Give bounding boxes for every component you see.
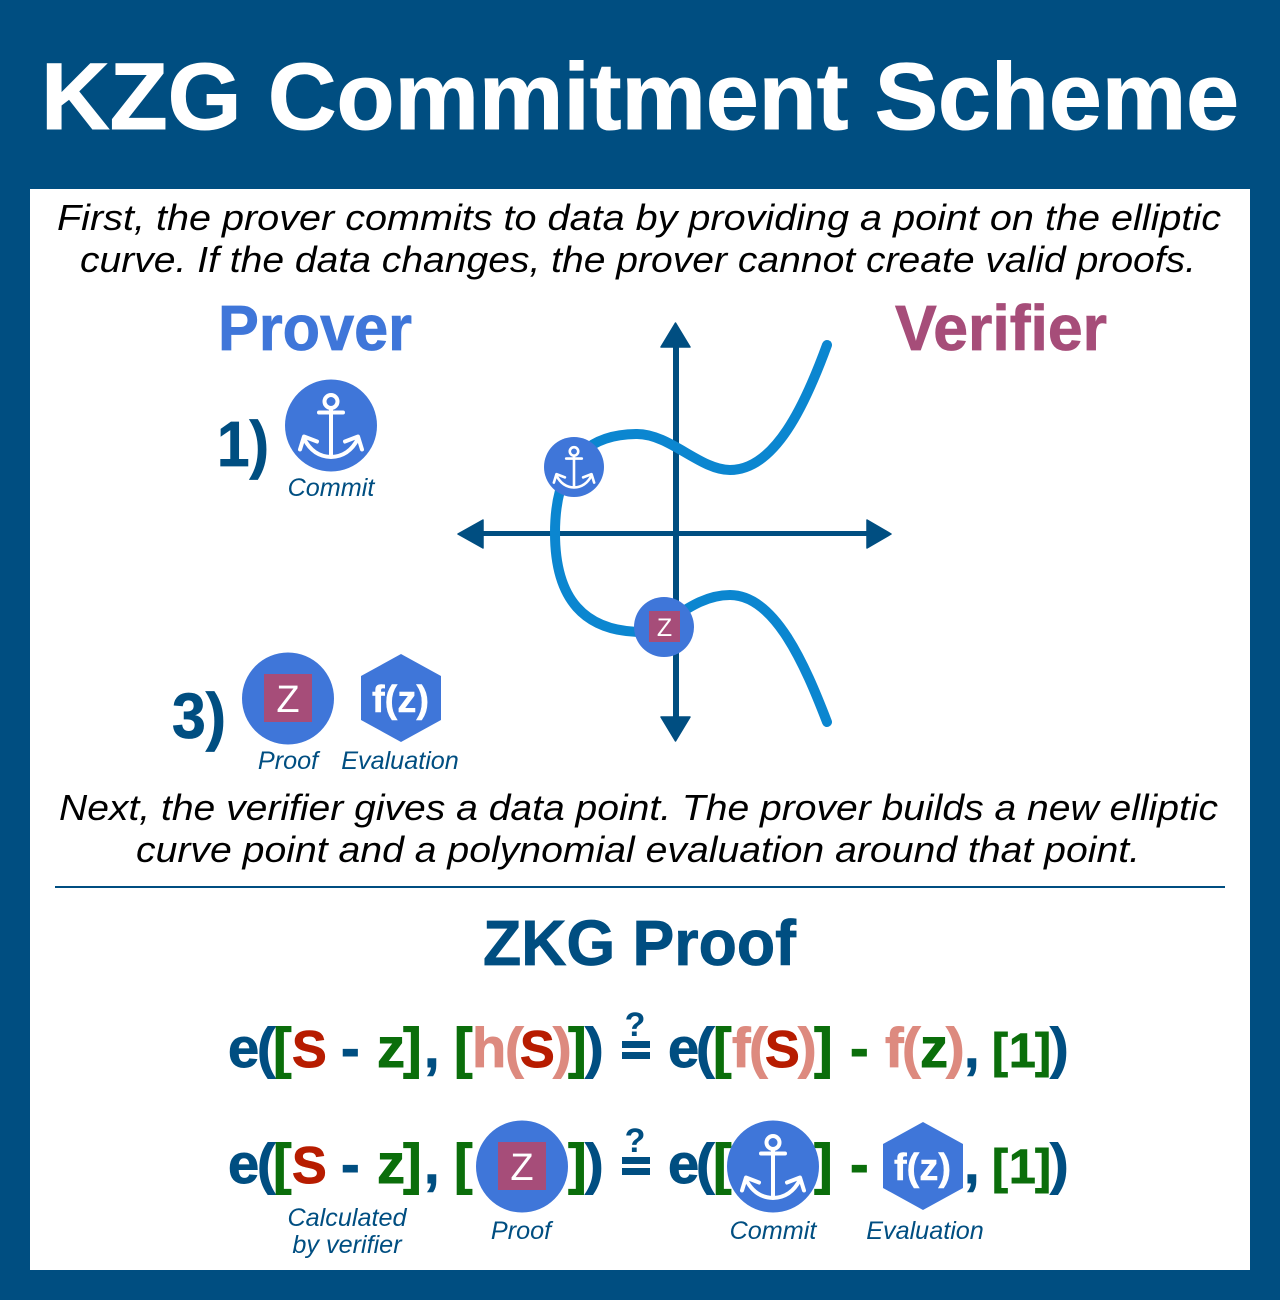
equation: icons: ]: [814, 1132, 833, 1195]
equation: formula: ): [798, 1016, 817, 1079]
point: proof: [634, 597, 694, 657]
text block: intro: curve. If the data changes, the prover cannot create valid proofs.: [80, 239, 1196, 280]
equation: formula: S: [292, 1021, 327, 1079]
equation: formula: S: [520, 1021, 555, 1079]
equation: formula: ,: [424, 1016, 440, 1079]
equation: icons: ): [585, 1132, 604, 1195]
text block: intro: First, the prover commits to data by providing a point on the elliptic: [57, 197, 1221, 238]
equation: formula: S: [765, 1021, 800, 1079]
equation: formula: ): [585, 1016, 604, 1079]
label: proof: Proof: [491, 1217, 554, 1245]
equation: icons: ,: [964, 1132, 980, 1195]
equation: formula: (: [257, 1016, 276, 1079]
equation: formula: 1: [1009, 1025, 1036, 1078]
text block: intro: [57, 197, 1221, 280]
icon: proof: Z: [276, 679, 300, 721]
not-equal check: ?: [625, 1122, 645, 1160]
equation: formula: (: [749, 1016, 768, 1079]
equation: icons: z: [377, 1132, 405, 1195]
text block: next step: Next, the verifier gives a data point. The prover builds a new elliptic: [59, 787, 1218, 828]
equation: formula: f: [732, 1016, 751, 1079]
heading: prover: Prover: [218, 292, 412, 364]
icon: proof in equation: Z: [510, 1147, 534, 1189]
label: proof: Proof: [258, 747, 321, 775]
not-equal check: [622, 1122, 650, 1175]
equation: formula: ): [553, 1016, 572, 1079]
equation: formula: [: [454, 1016, 473, 1079]
equation: formula: z: [920, 1016, 948, 1079]
equation: icons: -: [341, 1132, 360, 1195]
step 3 number: 3): [172, 680, 226, 752]
icon: proof in equation: [476, 1120, 568, 1212]
y axis arrow: [661, 323, 690, 741]
icon: evaluation hexagon: f(z): [372, 679, 429, 721]
equation: icons: e: [668, 1132, 699, 1195]
equation: icons: -: [850, 1132, 869, 1195]
chart: elliptic curve: [458, 323, 891, 741]
icon: evaluation in equation: f(z): [894, 1147, 951, 1189]
point: commit: [544, 437, 604, 497]
equation: formula: (: [696, 1016, 715, 1079]
equation: formula: h: [472, 1016, 506, 1079]
label: commit: Commit: [730, 1217, 817, 1245]
equation: formula: ]: [403, 1016, 422, 1079]
point: proof: Z: [657, 614, 672, 642]
label: commit: Commit: [288, 474, 375, 502]
equation: icons: ): [1050, 1132, 1069, 1195]
equation: formula: -: [341, 1016, 360, 1079]
equation: icons: [: [713, 1132, 732, 1195]
equation: icons: ]: [568, 1132, 587, 1195]
text block: next step: [59, 787, 1218, 870]
label: evaluation: Evaluation: [341, 747, 459, 775]
equation: formula: ]: [568, 1016, 587, 1079]
equation: formula: ): [946, 1016, 965, 1079]
equation: formula: [: [713, 1016, 732, 1079]
label: calculated by verifier: Calculated: [287, 1204, 407, 1232]
equation: icons: ,: [424, 1132, 440, 1195]
label: evaluation: Evaluation: [866, 1217, 984, 1245]
equation: icons: [228, 1122, 1069, 1195]
heading: proof: ZKG Proof: [483, 907, 797, 979]
equation: icons: [: [454, 1132, 473, 1195]
not-equal check: ?: [625, 1006, 645, 1044]
label: calculated by verifier: [287, 1204, 407, 1259]
equation: icons: ]: [1035, 1141, 1051, 1194]
equation: formula: e: [228, 1016, 259, 1079]
icon: proof: [242, 652, 334, 744]
title: KZG Commitment Scheme: [41, 44, 1239, 150]
panel: main content: [30, 189, 1250, 1270]
equation: icons: S: [292, 1137, 327, 1195]
equation: icons: [: [273, 1132, 292, 1195]
equation: formula: ,: [964, 1016, 980, 1079]
equation: formula: (: [505, 1016, 524, 1079]
icon: commit in equation: [727, 1120, 819, 1212]
equation: formula: ): [1050, 1016, 1069, 1079]
curve: [555, 345, 827, 722]
text block: next step: curve point and a polynomial evaluation around that point.: [136, 829, 1140, 870]
label: calculated by verifier: by verifier: [292, 1231, 403, 1259]
icon: evaluation hexagon: [361, 654, 441, 742]
equation: formula: f: [885, 1016, 904, 1079]
heading: verifier: Verifier: [895, 292, 1107, 364]
equation: formula: [228, 1006, 1069, 1079]
equation: formula: (: [902, 1016, 921, 1079]
equation: formula: e: [668, 1016, 699, 1079]
equation: formula: ]: [814, 1016, 833, 1079]
equation: icons: 1: [1009, 1141, 1036, 1194]
equation: icons: (: [696, 1132, 715, 1195]
equation: icons: [: [992, 1141, 1008, 1194]
not-equal check: [622, 1006, 650, 1059]
x axis arrow: [458, 520, 891, 548]
step 1 number: 1): [217, 408, 269, 480]
equation: icons: ]: [403, 1132, 422, 1195]
equation: formula: ]: [1035, 1025, 1051, 1078]
equation: formula: z: [377, 1016, 405, 1079]
equation: icons: e: [228, 1132, 259, 1195]
equation: formula: -: [850, 1016, 869, 1079]
icon: commit anchor: [285, 380, 377, 472]
equation: formula: [: [273, 1016, 292, 1079]
icon: evaluation in equation: [883, 1122, 963, 1210]
equation: icons: (: [257, 1132, 276, 1195]
equation: formula: [: [992, 1025, 1008, 1078]
